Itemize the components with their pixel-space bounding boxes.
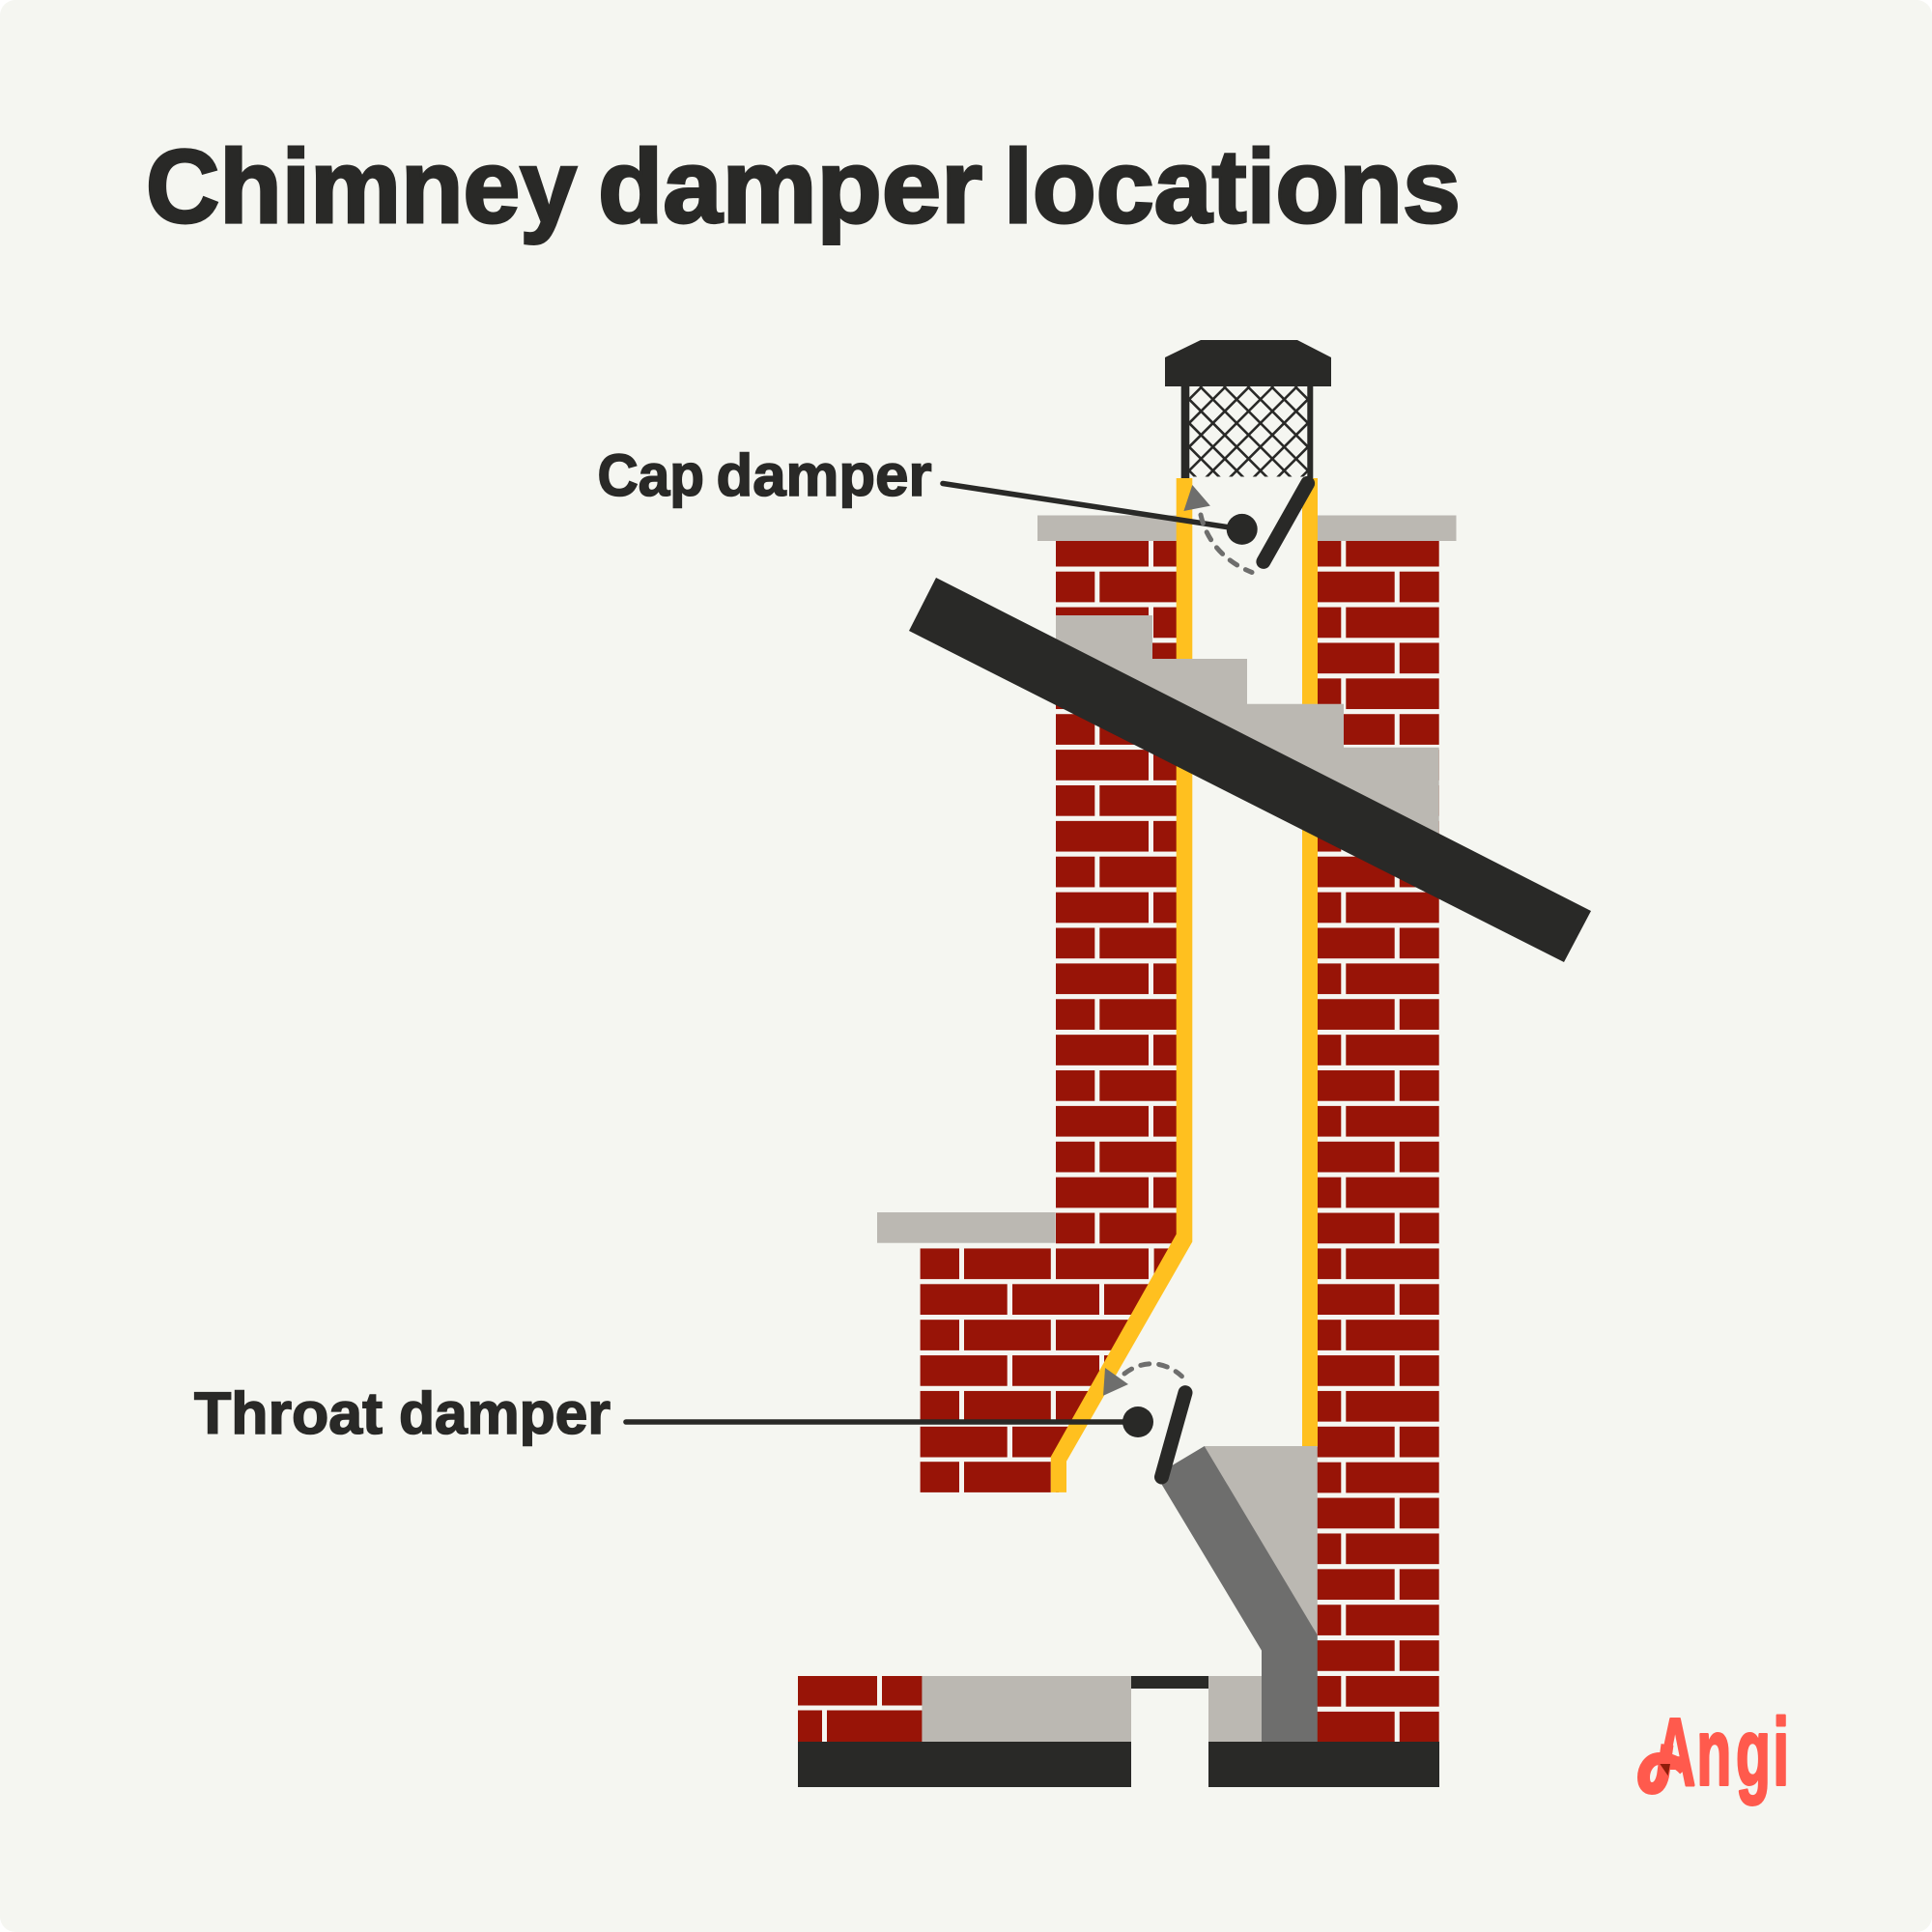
throat damper plate (1161, 1393, 1185, 1477)
cap damper label (597, 442, 931, 508)
chimney crown slabs (1037, 516, 1457, 541)
throat damper swing arrow (1103, 1364, 1181, 1396)
cap damper plate (1264, 483, 1308, 561)
hearth slabs (922, 1676, 1263, 1743)
cap damper label: Cap (597, 442, 704, 508)
left flue liner (1051, 478, 1192, 1492)
throat damper label (194, 1380, 611, 1446)
stepped flashing (1056, 615, 1439, 850)
cap damper swing arrow (1183, 485, 1252, 572)
Angi logo: A (1655, 1699, 1695, 1806)
title: Chimney (146, 128, 577, 244)
shoulder slab (877, 1212, 1056, 1243)
Angi logo: g (1736, 1700, 1771, 1805)
throat damper label: damper (399, 1380, 611, 1446)
smoke shelf (1205, 1446, 1318, 1635)
firebox lintel (1131, 1676, 1208, 1689)
right brick wall (1314, 541, 1439, 1743)
title (146, 128, 1461, 244)
Angi logo (1637, 1714, 1786, 1806)
chimney diagram (798, 340, 1591, 1787)
chimney cap mesh (1189, 386, 1308, 477)
cap damper label: damper (717, 442, 931, 508)
throat damper leader line (626, 1406, 1153, 1437)
roof (909, 578, 1591, 962)
cap damper leader line (943, 483, 1258, 545)
throat damper label: Throat (194, 1380, 383, 1446)
left brick wall, upper (1056, 541, 1182, 1243)
Angi logo: n (1696, 1700, 1731, 1805)
foundation (798, 1742, 1439, 1787)
title: locations (1004, 128, 1461, 244)
smoke chamber duct (1161, 1446, 1318, 1743)
right flue liner (1302, 478, 1318, 1447)
Angi logo: i (1773, 1700, 1789, 1805)
title: damper (598, 128, 982, 244)
chimney cap hood (1165, 340, 1331, 386)
chimney cap legs (1181, 384, 1313, 478)
bottom-left bricks (798, 1676, 923, 1743)
left brick wall, lower firebox block (920, 1248, 1169, 1492)
